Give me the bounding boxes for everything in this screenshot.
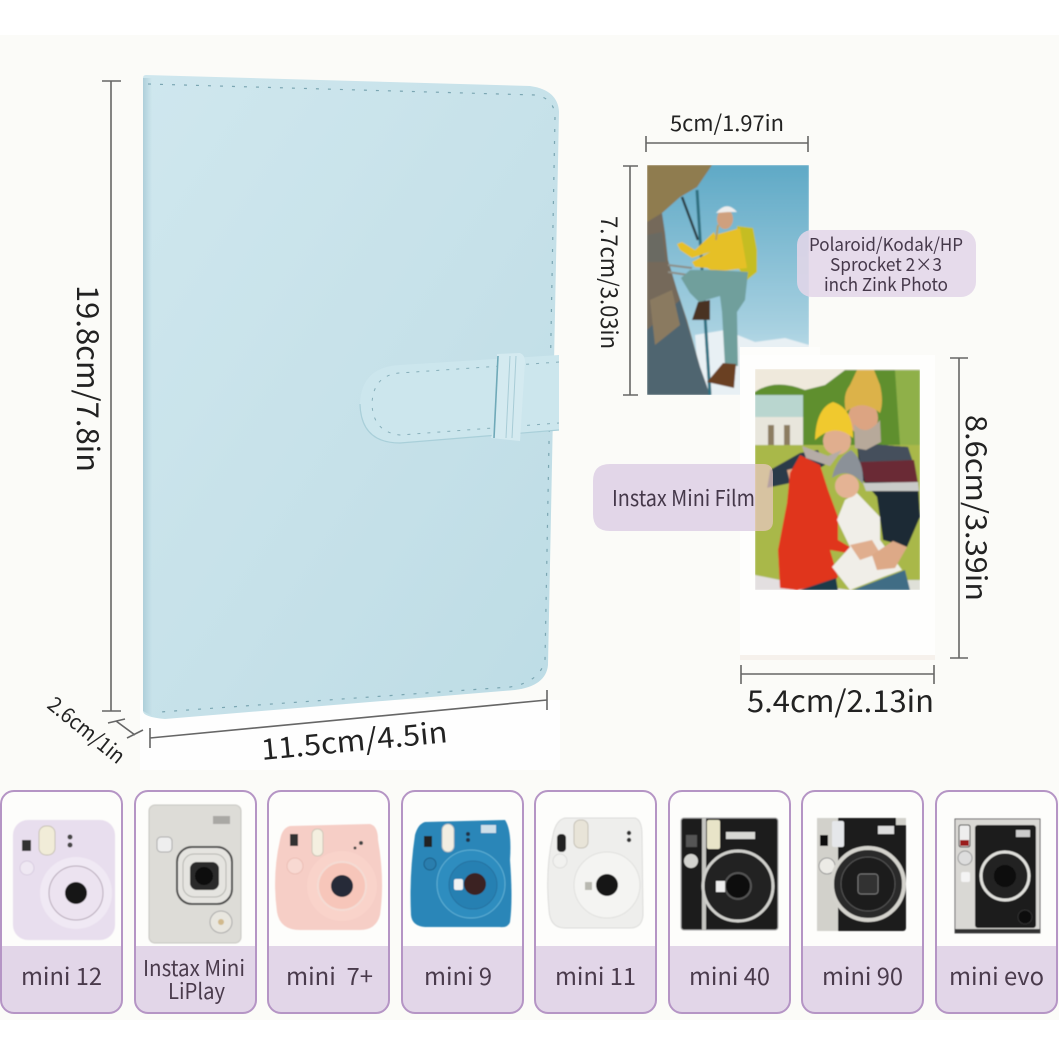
label: mini 9 (424, 957, 492, 992)
icon: mini 12 camera (13, 820, 115, 940)
dimension: photo width 5cm: 5cm/1.97in (670, 106, 784, 138)
instax film: white frame (740, 355, 935, 657)
label: mini evo (949, 957, 1044, 992)
camera card: Instax Mini LiPlay (135, 791, 256, 1013)
clasp strap (360, 353, 559, 443)
callout: Zink photo: Sprocket 2×3 (830, 251, 942, 277)
dimension: photo height 7.7cm: 7.7cm/3.03in (594, 216, 628, 349)
callout: Instax Mini Film (593, 464, 773, 531)
dimension: film width 5.4cm: 5.4cm/2.13in (747, 677, 934, 721)
dimension: album thickness: 2.6cm/1in (42, 689, 132, 770)
child (832, 450, 910, 590)
man (767, 370, 920, 547)
label: mini 11 (555, 957, 636, 992)
woman (778, 402, 853, 590)
camera card: mini 90 (802, 791, 923, 1013)
icon: mini 7+ camera (275, 824, 382, 930)
label: mini 12 (21, 957, 102, 992)
label: mini 90 (822, 957, 903, 992)
album: closed light blue cover (143, 75, 559, 719)
dimension: album height: 19.8cm/7.8in (68, 285, 112, 472)
camera card: mini evo (936, 791, 1057, 1013)
camera card: mini 40 (669, 791, 790, 1013)
label: mini 40 (689, 957, 770, 992)
stitching on cover (148, 84, 555, 712)
icon: mini 40 camera (681, 818, 778, 930)
camera card: Instax Mini LiPlay: LiPlay (168, 974, 225, 1006)
camera card: mini 7+ (268, 791, 389, 1013)
dimension: album width (150, 690, 547, 769)
callout: Zink photo: inch Zink Photo (824, 271, 948, 297)
dimension: film height 8.6cm: 8.6cm/3.39in (957, 415, 999, 601)
callout: Instax Mini Film: Instax Mini Film (612, 481, 755, 513)
dimension: photo height 7.7cm (594, 166, 638, 395)
label: mini 7+ (286, 957, 373, 992)
icon: mini 11 camera (548, 818, 643, 928)
dimension: album height (68, 81, 121, 711)
dimension: photo width 5cm (646, 106, 808, 152)
callout: Zink photo (797, 230, 976, 297)
camera card: mini 9 (402, 791, 523, 1013)
icon: mini evo camera (955, 819, 1040, 933)
photo: family (Instax film) (755, 369, 920, 590)
label: Instax Mini (143, 951, 245, 983)
dimension: album width: 11.5cm/4.5in (259, 709, 449, 769)
icon: mini 90 camera (817, 818, 906, 931)
climber figure (677, 206, 757, 388)
photo: climber (Zink print) (647, 165, 809, 395)
callout: Zink photo: Polaroid/Kodak/HP (809, 231, 963, 257)
icon: mini 9 camera (410, 820, 512, 927)
icon: LiPlay camera (149, 805, 241, 943)
dimension: film height 8.6cm (950, 358, 999, 658)
camera card: mini 12 (1, 791, 122, 1013)
camera card: mini 11 (535, 791, 656, 1013)
